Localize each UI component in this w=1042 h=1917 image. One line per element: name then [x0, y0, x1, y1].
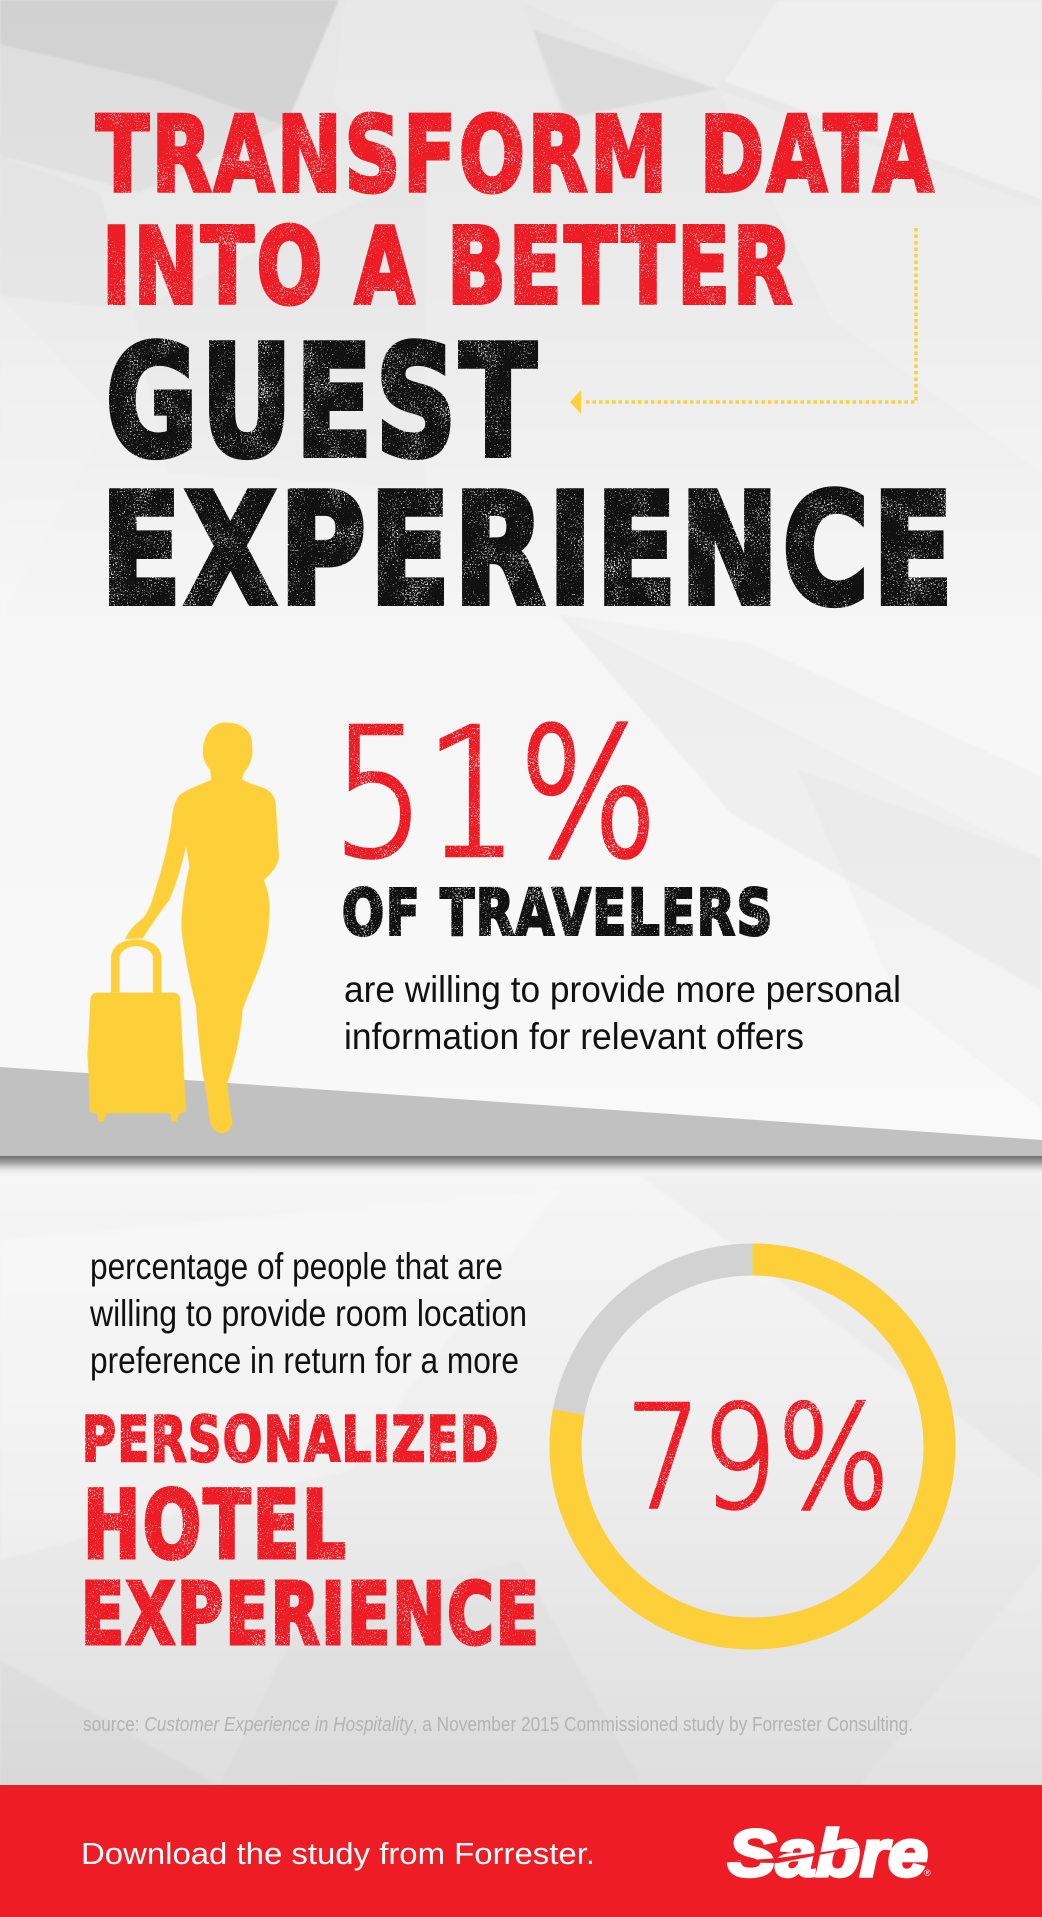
- number: 51%: 51%: [332, 691, 658, 897]
- icon: traveler with suitcase: [88, 722, 279, 1133]
- label: of travelers: OF TRAVELERS: [342, 876, 774, 950]
- number: 79%: 79%: [626, 1376, 890, 1541]
- floor band: [0, 1067, 1042, 1176]
- title: black lines: GUEST: [106, 314, 540, 490]
- description: preference in return for a more: [90, 1340, 519, 1381]
- description: are willing to provide more personal: [344, 969, 901, 1010]
- description: willing to provide room location: [89, 1293, 527, 1334]
- title: red lines: INTO A BETTER: [102, 206, 795, 328]
- description: percentage of people that are: [90, 1246, 503, 1287]
- footer text: Download the study from Forrester.: [81, 1836, 595, 1871]
- description: [344, 969, 901, 1057]
- stat: 51 percent of travelers: [332, 691, 901, 1057]
- footer bar: [0, 1785, 1042, 1917]
- heading: [81, 1403, 541, 1664]
- title: red lines: [96, 94, 936, 328]
- description: information for relevant offers: [344, 1016, 804, 1057]
- logo: Sabre: Sabre: [728, 1816, 928, 1890]
- dotted arrow: [570, 228, 916, 414]
- background: lower low-poly panel: [0, 1160, 1042, 1800]
- heading: EXPERIENCE: [81, 1566, 541, 1664]
- title: black lines: [101, 314, 957, 638]
- donut chart: 79 percent: [566, 1260, 940, 1634]
- text block: personalized hotel experience: [81, 1246, 541, 1664]
- logo: Sabre: ®: [924, 1868, 931, 1878]
- heading: PERSONALIZED: [82, 1403, 500, 1476]
- description: [89, 1246, 527, 1381]
- source note: source: Customer Experience in Hospitality, a November 2015 Commissioned study by Forrester Consulting.: [83, 1714, 913, 1736]
- title: [96, 94, 957, 638]
- heading: HOTEL: [83, 1472, 348, 1580]
- background: upper low-poly panel: [0, 0, 1042, 1160]
